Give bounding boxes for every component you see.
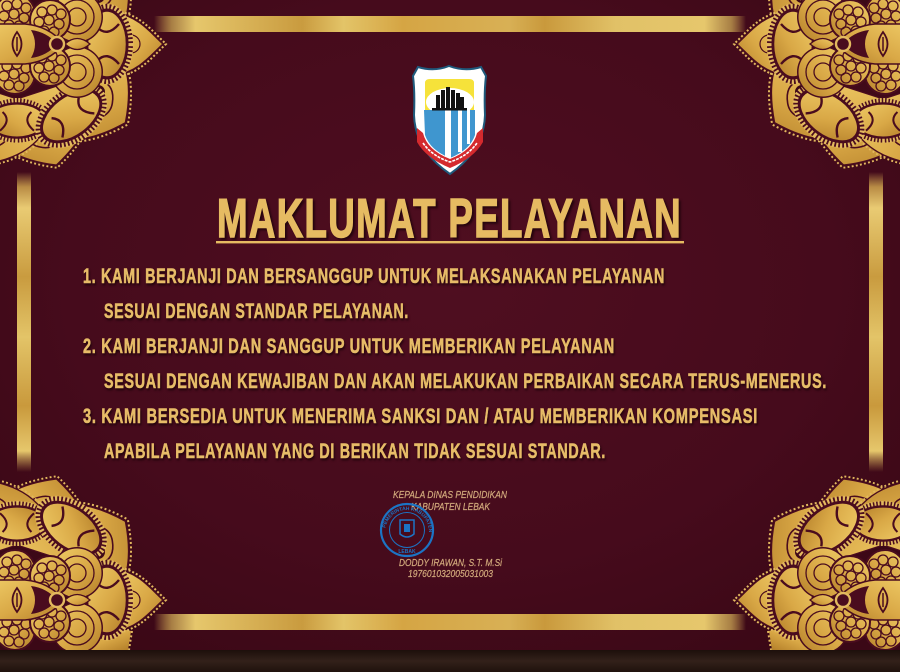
signature: name and ID: DODDY IRAWAN, S.T. M.Si <box>399 558 503 569</box>
stamp: blue round seal: LEBAK <box>398 549 416 555</box>
ornament: bottom-right mandala <box>732 476 900 650</box>
logo: Kabupaten Lebak shield <box>413 66 486 174</box>
ornament: top-right mandala <box>732 0 900 169</box>
top gold bar <box>154 16 746 32</box>
signature: office title: KEPALA DINAS PENDIDIKAN <box>393 490 508 501</box>
stamp: blue round seal <box>380 502 434 558</box>
wooden floor strip <box>0 650 900 672</box>
signature: office title: KABUPATEN LEBAK <box>411 502 491 513</box>
signature: name and ID <box>399 558 503 580</box>
left gold bar <box>17 172 31 472</box>
pledge 2 line 1: 2. KAMI BERJANJI DAN SANGGUP UNTUK MEMBERIKAN PELAYANAN <box>83 335 615 358</box>
ornament: top-left mandala <box>0 0 168 169</box>
signature: name and ID: 197601032005031003 <box>408 569 493 580</box>
pledge 1 line 2: SESUAI DENGAN STANDAR PELAYANAN. <box>104 300 409 323</box>
stamp: blue round seal: PEMERINTAH KABUPATEN <box>382 506 432 532</box>
text block: pledge list <box>83 265 827 463</box>
pledge 3 line 2: APABILA PELAYANAN YANG DI BERIKAN TIDAK SESUAI STANDAR. <box>104 440 606 463</box>
right gold bar <box>869 172 883 472</box>
title underline <box>216 241 684 243</box>
signature: office title <box>393 490 508 513</box>
title: MAKLUMAT PELAYANAN <box>217 187 682 249</box>
bottom gold bar <box>154 614 746 630</box>
ornament: bottom-left mandala <box>0 476 168 650</box>
